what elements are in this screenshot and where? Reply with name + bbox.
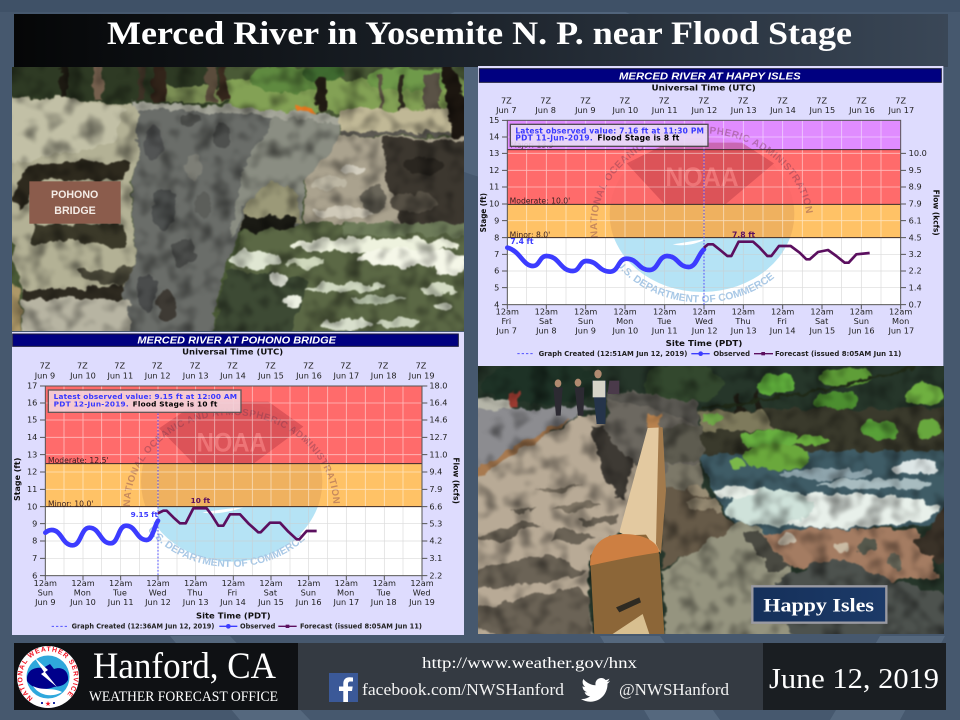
legend: Forecast (issued 8:05AM Jun 11) <box>775 349 901 358</box>
site time axis labels: Sat <box>539 316 552 326</box>
site time axis labels: 12am <box>222 578 245 588</box>
wood rail and post <box>590 427 666 634</box>
site time axis labels: 12am <box>335 578 358 588</box>
stage axis labels: 13 <box>489 148 499 158</box>
stage axis labels: 6 <box>32 570 37 580</box>
site time axis labels: Fri <box>501 316 511 326</box>
top axis labels: 7Z <box>77 361 88 371</box>
stage axis labels: 10 <box>489 199 499 209</box>
top axis labels: Jun 17 <box>887 105 914 115</box>
site time axis labels: Mon <box>74 588 91 598</box>
site time axis labels: 12am <box>34 578 57 588</box>
site time axis title: Site Time (PDT) <box>666 338 743 348</box>
top axis labels: 7Z <box>698 96 709 106</box>
site time axis labels: 12am <box>373 578 396 588</box>
site time axis labels <box>34 578 435 607</box>
flow axis labels: 9.4 <box>429 467 442 477</box>
callout: latest observed value: Flood Stage is 8 ft <box>597 134 680 143</box>
flood stage labels: Minor: 8.0' <box>510 230 550 239</box>
top axis labels: Jun 9 <box>574 105 596 115</box>
flow axis labels: 2.2 <box>429 570 442 580</box>
top axis labels: Jun 8 <box>534 105 556 115</box>
site time axis labels: Sat <box>815 316 828 326</box>
legend: Observed <box>240 622 275 631</box>
stage axis labels: 8 <box>494 232 499 242</box>
stage axis labels: 9 <box>32 518 37 528</box>
top axis labels: Jun 17 <box>332 371 359 381</box>
flow axis labels: 10.0 <box>909 148 927 158</box>
axis title: flow: Flow (kcfs) <box>451 457 461 504</box>
site time axis labels: 12am <box>653 307 676 317</box>
top axis labels: Jun 10 <box>69 371 96 381</box>
flood stage labels: Major: 13.3' <box>510 141 556 150</box>
panel: Pohono Bridge hydrograph <box>12 332 464 635</box>
stage axis labels: 13 <box>27 449 37 459</box>
callout: latest observed value: PDT 11-Jun-2019. <box>515 134 593 143</box>
top axis labels <box>495 96 914 115</box>
top axis labels: Jun 19 <box>408 371 435 381</box>
graph-created marker line <box>156 413 159 576</box>
flow axis labels: 7.9 <box>909 199 922 209</box>
stage axis labels: 7 <box>494 249 499 259</box>
site time axis labels: Jun 9 <box>574 325 596 335</box>
NOAA watermark: U.S. DEPARTMENT OF COMMERCE <box>149 526 305 567</box>
date panel <box>763 643 946 710</box>
stage axis labels: 9 <box>494 215 499 225</box>
website: http://www.weather.gov/hnx <box>422 655 637 672</box>
value labels: 7.8 ft <box>732 231 756 240</box>
top axis labels: Jun 14 <box>219 371 246 381</box>
stage axis labels: 12 <box>489 165 499 175</box>
flow axis labels: 12.7 <box>429 432 448 442</box>
value labels: 9.15 ft <box>131 510 158 519</box>
site time axis labels: Jun 7 <box>495 325 517 335</box>
site time axis labels: Jun 12 <box>691 325 718 335</box>
site time axis labels: 12am <box>259 578 283 588</box>
flood bands <box>507 120 901 305</box>
office panel <box>14 643 298 710</box>
site time axis labels: Jun 15 <box>257 597 284 607</box>
plot area <box>502 120 906 310</box>
site time axis labels: Sun <box>578 316 593 326</box>
NOAA watermark <box>123 402 340 567</box>
flow axis labels: 2.2 <box>909 266 922 276</box>
site time axis labels: Jun 18 <box>370 597 397 607</box>
site time axis labels: Jun 16 <box>295 597 322 607</box>
universal time axis title: Universal Time (UTC) <box>182 348 283 357</box>
site time axis labels: Wed <box>695 316 713 326</box>
site time axis labels: Jun 16 <box>848 325 875 335</box>
site time axis labels: Jun 19 <box>408 597 435 607</box>
flow axis labels: 8.9 <box>909 182 922 192</box>
chart title bar <box>479 69 941 82</box>
top axis labels: 7Z <box>895 96 906 106</box>
NOAA watermark: NOAA <box>665 162 739 192</box>
icon: facebook <box>329 673 358 702</box>
sign: Pohono Bridge: POHONO <box>51 189 98 201</box>
top axis labels: Jun 7 <box>495 105 517 115</box>
value labels <box>131 496 211 519</box>
site time axis labels: 12am <box>410 578 434 588</box>
site time axis labels: Sun <box>854 316 869 326</box>
icon: NWS logo: ★ <box>45 700 51 708</box>
stage axis labels: 15 <box>27 415 37 425</box>
stage axis labels: 16 <box>27 398 37 408</box>
top axis labels: 7Z <box>738 96 749 106</box>
stage axis labels: 8 <box>32 536 37 546</box>
site time axis labels: 12am <box>496 307 519 317</box>
site time axis labels: Mon <box>337 588 354 598</box>
sign: Pohono Bridge <box>29 181 121 224</box>
stage axis labels: 4 <box>494 299 499 309</box>
value labels: 7.4 ft <box>510 237 534 246</box>
legend: Observed <box>713 349 750 358</box>
flow axis labels: 18.0 <box>429 381 448 391</box>
site time axis labels: Jun 17 <box>332 597 359 607</box>
site time axis labels: Jun 14 <box>219 597 246 607</box>
site time axis labels <box>495 307 914 335</box>
site time axis labels: Wed <box>413 588 431 598</box>
callout: Happy Isles label: Happy Isles <box>763 596 875 617</box>
site time axis labels: Jun 17 <box>887 325 914 335</box>
site time axis labels: Sun <box>301 588 316 598</box>
site time axis labels: 12am <box>692 307 716 317</box>
site time axis labels: Fri <box>777 316 787 326</box>
chart title bar <box>13 334 458 347</box>
callout: latest observed value: Latest observed value: 7.16 ft at 11:30 PM <box>515 126 704 135</box>
stage axis labels: 14 <box>489 132 499 142</box>
facebook handle: facebook.com/NWSHanford <box>362 680 565 699</box>
top axis labels: Jun 15 <box>808 105 835 115</box>
legend <box>517 349 901 358</box>
site time axis labels: 12am <box>613 307 637 317</box>
site time axis labels: Mon <box>892 316 909 326</box>
site time axis labels: Jun 15 <box>808 325 835 335</box>
icon: NWS logo: NATIONAL WEATHER SERVICE <box>18 646 78 702</box>
site time axis labels: Jun 11 <box>107 597 134 607</box>
stage axis labels: 17 <box>27 381 37 391</box>
top axis labels: 7Z <box>265 361 276 371</box>
flow axis labels: 4.5 <box>909 232 922 242</box>
flow axis labels: 6.6 <box>429 501 442 511</box>
forecast line <box>704 242 870 263</box>
flow axis labels: 0.7 <box>909 299 922 309</box>
site time axis labels: Tue <box>112 588 127 598</box>
grid lines <box>507 120 901 238</box>
top axis labels: Jun 9 <box>34 371 55 381</box>
site time axis labels: Thu <box>734 316 751 326</box>
site time axis labels: Sun <box>38 588 53 598</box>
top axis labels: 7Z <box>152 361 163 371</box>
site time axis labels: 12am <box>184 578 207 588</box>
site time axis labels: Jun 11 <box>651 325 678 335</box>
universal time axis title: Universal Time (UTC) <box>651 83 756 92</box>
stage axis labels: 14 <box>27 432 37 442</box>
site time axis labels: Jun 10 <box>69 597 96 607</box>
flow axis labels: 1.4 <box>909 282 922 292</box>
stage axis labels: 7 <box>32 553 37 563</box>
icon: twitter <box>581 678 610 702</box>
flow axis labels: 5.3 <box>429 518 442 528</box>
flow axis labels: 6.1 <box>909 215 922 225</box>
flow axis labels: 4.2 <box>429 536 442 546</box>
photo: Happy Isles <box>478 366 944 634</box>
site time axis labels: Jun 8 <box>535 325 557 335</box>
legend: Graph Created (12:36AM Jun 12, 2019) <box>72 622 214 631</box>
NOAA watermark: NATIONAL OCEANIC AND ATMOSPHERIC ADMINISTRATION <box>123 409 340 506</box>
flow axis labels: 16.4 <box>429 398 448 408</box>
flow axis labels: 3.1 <box>429 553 442 563</box>
callout: Happy Isles label <box>752 586 886 623</box>
top axis labels: 7Z <box>619 96 630 106</box>
axis title: stage: Stage (ft) <box>12 457 22 501</box>
title: Merced River in Yosemite N. P. near Flood Stage <box>107 16 852 52</box>
callout: latest observed value <box>48 390 241 412</box>
flow axis labels: 11.0 <box>429 449 448 459</box>
flow axis labels: 9.5 <box>909 165 922 175</box>
top axis labels: Jun 18 <box>370 371 397 381</box>
flood stage labels <box>48 456 109 509</box>
top axis labels: Jun 12 <box>690 105 717 115</box>
site time axis labels: 12am <box>889 307 912 317</box>
forecast line <box>158 508 317 539</box>
flood stage labels: Moderate: 10.0' <box>510 197 570 206</box>
site time axis labels: Tue <box>376 588 391 598</box>
site time axis labels: Fri <box>227 588 237 598</box>
NOAA watermark: U.S. DEPARTMENT OF COMMERCE <box>619 264 774 302</box>
chart title bar: MERCED RIVER AT HAPPY ISLES <box>619 71 801 82</box>
observed line <box>45 521 158 545</box>
stage axis labels: 10 <box>27 501 37 511</box>
legend: Graph Created (12:51AM Jun 12, 2019) <box>539 349 687 358</box>
site time axis labels: 12am <box>810 307 834 317</box>
top axis labels: Jun 14 <box>769 105 796 115</box>
site time axis labels: 12am <box>297 578 320 588</box>
panel: Happy Isles hydrograph <box>478 66 944 366</box>
office name: Hanford, CA <box>93 646 276 687</box>
top axis labels: 7Z <box>114 361 125 371</box>
flood bands <box>45 386 422 576</box>
legend: Forecast (issued 8:05AM Jun 11) <box>300 622 422 631</box>
top axis labels: 7Z <box>340 361 351 371</box>
top axis labels: 7Z <box>190 361 201 371</box>
site time axis labels: Jun 12 <box>144 597 171 607</box>
top axis labels: 7Z <box>816 96 827 106</box>
top axis labels: 7Z <box>540 96 551 106</box>
top axis labels: 7Z <box>856 96 867 106</box>
hikers on the path <box>553 370 619 424</box>
footer bar <box>14 643 946 710</box>
callout: latest observed value: PDT 12-Jun-2019. <box>54 400 129 409</box>
title banner <box>14 14 948 67</box>
top axis labels: 7Z <box>501 96 512 106</box>
top axis labels: Jun 13 <box>182 371 209 381</box>
top axis labels: Jun 16 <box>295 371 322 381</box>
flood stage labels: Moderate: 12.5' <box>48 456 109 465</box>
graph-created marker line <box>702 150 705 305</box>
top axis labels: 7Z <box>40 361 51 371</box>
top axis labels: Jun 11 <box>651 105 678 115</box>
top axis labels <box>34 361 435 381</box>
site time axis labels: Tue <box>656 316 671 326</box>
value labels <box>510 231 756 246</box>
top axis labels: Jun 11 <box>106 371 133 381</box>
stage axis labels: 12 <box>27 467 37 477</box>
site time axis labels: Jun 13 <box>182 597 209 607</box>
photo: Pohono Bridge <box>12 67 464 331</box>
flood stage labels <box>510 141 570 239</box>
plot area <box>40 386 428 580</box>
flow axis labels <box>429 381 448 580</box>
site time axis labels: Jun 10 <box>611 325 638 335</box>
stage axis labels: 5 <box>494 282 499 292</box>
site time axis labels: Mon <box>616 316 633 326</box>
axis title: stage: Stage (ft) <box>478 193 488 232</box>
site time axis labels: 12am <box>146 578 170 588</box>
axis title: flow: Flow (kcfs) <box>932 190 942 236</box>
site time axis labels: Thu <box>186 588 203 598</box>
top axis labels: Jun 10 <box>611 105 638 115</box>
top axis labels: 7Z <box>227 361 238 371</box>
NOAA watermark <box>590 126 813 302</box>
flood stage labels: Minor: 10.0' <box>48 500 93 509</box>
top axis labels: 7Z <box>777 96 788 106</box>
chart title bar: MERCED RIVER AT POHONO BRIDGE <box>137 336 337 347</box>
stage axis labels: 15 <box>489 115 499 125</box>
stage axis labels: 6 <box>494 266 499 276</box>
site time axis labels: Jun 13 <box>730 325 757 335</box>
stage axis labels: 11 <box>27 484 37 494</box>
stage axis labels <box>489 115 499 309</box>
flow axis labels: 3.2 <box>909 249 922 259</box>
top axis labels: Jun 12 <box>144 371 171 381</box>
twitter handle: @NWSHanford <box>619 680 730 699</box>
grid lines <box>45 386 422 507</box>
site time axis labels: 12am <box>850 307 873 317</box>
site time axis labels: 12am <box>71 578 95 588</box>
NOAA watermark: NOAA <box>197 428 267 458</box>
date panel: June 12, 2019 <box>769 664 939 695</box>
callout: latest observed value: Latest observed value: 9.15 ft at 12:00 AM <box>54 392 237 401</box>
top axis labels: 7Z <box>303 361 314 371</box>
callout: latest observed value <box>510 124 708 146</box>
site time axis labels: 12am <box>109 578 132 588</box>
sign: Pohono Bridge: BRIDGE <box>54 205 96 217</box>
stage axis labels: 11 <box>489 182 499 192</box>
flow axis labels <box>909 148 927 309</box>
flow axis labels: 7.9 <box>429 484 442 494</box>
site time axis labels: Jun 9 <box>34 597 56 607</box>
site time axis labels: 12am <box>732 307 755 317</box>
site time axis labels: Jun 14 <box>769 325 796 335</box>
top axis labels: 7Z <box>378 361 389 371</box>
callout: latest observed value: Flood Stage is 10 ft <box>133 400 218 409</box>
top axis labels: 7Z <box>416 361 427 371</box>
site time axis labels: 12am <box>574 307 597 317</box>
legend <box>52 622 422 631</box>
stage axis labels <box>27 381 37 580</box>
value labels: 10 ft <box>191 496 211 505</box>
site time axis title: Site Time (PDT) <box>196 611 271 621</box>
office subtitle: WEATHER FORECAST OFFICE <box>89 689 278 705</box>
site time axis labels: Sat <box>264 588 277 598</box>
flow axis labels: 14.6 <box>429 415 448 425</box>
NOAA watermark: NATIONAL OCEANIC AND ATMOSPHERIC ADMINISTRATION <box>590 126 813 238</box>
site time axis labels: Wed <box>149 588 167 598</box>
top axis labels: 7Z <box>659 96 670 106</box>
top axis labels: Jun 15 <box>257 371 284 381</box>
observed line <box>507 248 704 272</box>
site time axis labels: 12am <box>771 307 794 317</box>
site time axis labels: 12am <box>535 307 558 317</box>
top axis labels: Jun 16 <box>848 105 875 115</box>
top axis labels: Jun 13 <box>730 105 757 115</box>
top axis labels: 7Z <box>580 96 591 106</box>
